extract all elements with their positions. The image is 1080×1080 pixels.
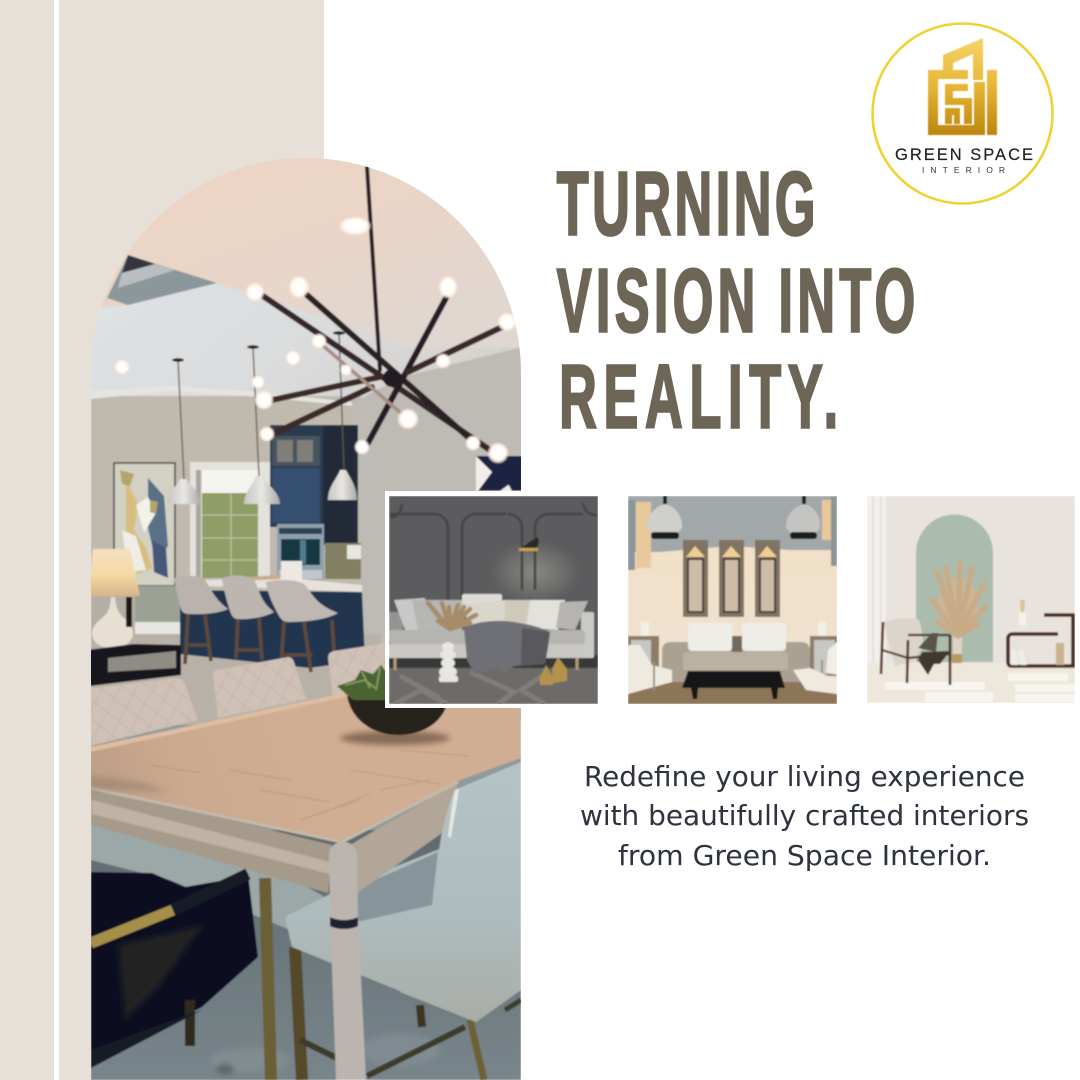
- table shadow at left edge: [90, 775, 170, 792]
- body text: [580, 761, 1029, 872]
- light area beneath table: [91, 825, 330, 930]
- glass side table: [88, 644, 181, 686]
- logo sub-wordmark: INTERIOR: [922, 165, 1005, 175]
- pampas grass: [428, 603, 476, 629]
- floor: [867, 663, 1075, 703]
- dark floor band: [389, 655, 598, 669]
- sofa: [389, 594, 594, 670]
- lounge chair: [881, 618, 950, 685]
- baseboard: [135, 622, 185, 636]
- wall mouldings: [390, 503, 597, 600]
- warm cove lights: [628, 496, 837, 570]
- quilted dining chairs: [86, 643, 386, 746]
- grey chair back: [400, 788, 460, 1014]
- doorway and green shelves: [190, 462, 270, 578]
- wall art right: [476, 456, 522, 496]
- ceiling: [102, 158, 520, 350]
- succulent: [337, 665, 389, 700]
- chandelier and ceiling lights: [114, 216, 517, 464]
- logo building mark: [928, 38, 997, 135]
- kitchen floor: [91, 634, 381, 734]
- back wall: [91, 395, 362, 593]
- sage green arch niche: [916, 514, 993, 662]
- under-table backdrop: [91, 725, 521, 835]
- gold vases: [540, 657, 567, 685]
- panel: beige left stripe: [0, 0, 54, 1080]
- headline line 2: VISION INTO: [557, 250, 915, 351]
- wainscot: [135, 586, 185, 623]
- inset photo 2: warm living room: [628, 496, 837, 704]
- main arched photo: dining room and kitchen: [85, 150, 522, 1080]
- side armchairs: [628, 642, 837, 694]
- logo wordmark: GREEN SPACE: [895, 146, 1033, 164]
- abstract painting: [114, 463, 175, 586]
- grey upper wall: [628, 496, 837, 552]
- body line 1: Redefine your living experience: [584, 761, 1025, 793]
- kitchen island: [180, 561, 365, 668]
- panel: beige column behind arch: [59, 0, 324, 1080]
- wall niches: [683, 540, 780, 617]
- headline line 1: TURNING: [557, 153, 815, 254]
- right wall: [352, 347, 522, 720]
- wall light pool: [489, 540, 581, 604]
- pampas vase: [952, 630, 962, 663]
- blanket dark fold: [521, 628, 550, 666]
- metal chair legs: [265, 878, 521, 1080]
- pampas grass: [932, 563, 986, 636]
- body line 2: with beautifully crafted interiors: [580, 800, 1029, 832]
- brown shelf: [1008, 615, 1073, 666]
- floor: [628, 682, 837, 704]
- throw blanket: [464, 621, 550, 674]
- headline line 3: REALITY.: [559, 346, 838, 447]
- herringbone floor: [389, 668, 598, 704]
- kitchen cabinets: [270, 425, 361, 579]
- black bowl: [347, 696, 446, 735]
- pendant lamps: [167, 331, 357, 504]
- table leg: [329, 842, 366, 1080]
- pendant lights: [647, 496, 820, 539]
- tray recess: [107, 255, 217, 305]
- oven: [277, 524, 324, 580]
- crown moulding: [91, 386, 352, 406]
- headline: [557, 153, 915, 447]
- grey panelled wall: [389, 496, 598, 666]
- bowl shadow: [340, 731, 450, 745]
- dining table: [90, 693, 521, 893]
- white stacked vase: [439, 642, 458, 682]
- body line 3: from Green Space Interior.: [618, 840, 991, 872]
- logo badge: [872, 24, 1052, 204]
- lamp-side wall tint: [92, 596, 134, 633]
- shelf decor: [1011, 600, 1064, 665]
- dark wooden stand behind lamp: [126, 597, 132, 627]
- cream wall: [628, 496, 837, 686]
- grey chair seat: [285, 848, 440, 992]
- inset photo 1: grey living room: [389, 496, 598, 704]
- chandelier rods: [263, 167, 502, 450]
- white column: [867, 496, 886, 671]
- table lamp: [88, 549, 140, 648]
- black coffee table: [682, 671, 785, 699]
- side tables: [628, 622, 837, 676]
- floor mottling: [210, 1034, 440, 1074]
- logo ring: [872, 24, 1052, 204]
- inset photo 3: arched niche room: [867, 496, 1075, 703]
- inset photo 1 white frame: [385, 491, 602, 708]
- wall lamp: [519, 537, 539, 551]
- dark chair on left: [91, 872, 258, 1068]
- bar stools: [174, 576, 338, 672]
- floor under table: [91, 830, 521, 1080]
- floor light patches: [885, 673, 1075, 702]
- lower ceiling: [91, 283, 510, 398]
- sofa: [662, 623, 810, 682]
- cream wall: [867, 496, 1075, 671]
